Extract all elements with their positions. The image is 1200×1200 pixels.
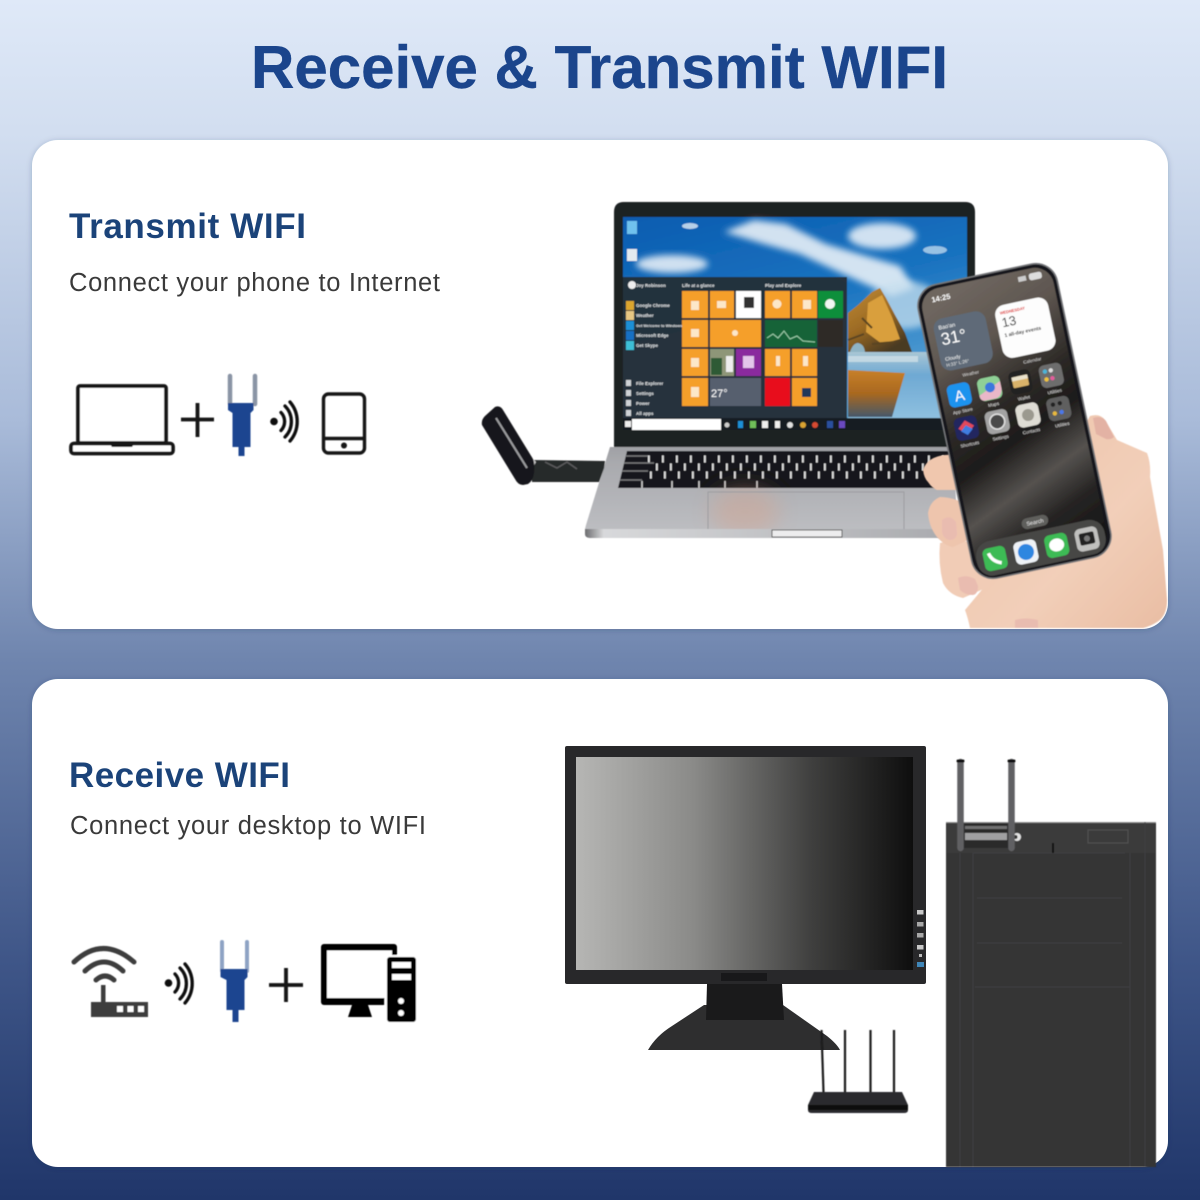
taskbar start button bbox=[625, 421, 631, 427]
laptop lid bbox=[614, 202, 975, 447]
start menu bbox=[623, 277, 847, 418]
calendar widget: Calendar bbox=[1023, 356, 1042, 365]
taskbar icons bbox=[724, 421, 845, 428]
start menu tiles bbox=[682, 291, 843, 406]
icon: signal waves bbox=[270, 402, 297, 441]
start menu list: Microsoft Edge bbox=[636, 333, 669, 338]
image: router bbox=[808, 1030, 908, 1113]
weather widget: H:33° L:26° bbox=[946, 358, 970, 368]
tower dongle roller bbox=[965, 833, 1007, 840]
weather widget: 31° bbox=[939, 325, 968, 349]
start menu list: File Explorer bbox=[636, 381, 664, 386]
router antennas bbox=[822, 1030, 894, 1092]
search pill: Search bbox=[1026, 518, 1044, 528]
panel background: transmit bbox=[32, 140, 1168, 629]
icon: plus bbox=[269, 968, 303, 1002]
finger two bbox=[928, 497, 972, 547]
icon: signal waves bbox=[165, 964, 192, 1003]
start menu list: Google Chrome bbox=[636, 303, 670, 308]
app labels: Contacts bbox=[1022, 427, 1041, 435]
finger nails bbox=[942, 517, 1038, 628]
app labels: Shortcuts bbox=[960, 440, 980, 449]
laptop base deck bbox=[585, 447, 957, 529]
tower top band bbox=[947, 823, 1155, 853]
dongle usb body bbox=[532, 460, 605, 482]
dock bbox=[973, 517, 1109, 579]
calendar widget: WEDNESDAY bbox=[999, 305, 1026, 316]
text: connect desktop: Connect your desktop to WIFI bbox=[70, 812, 426, 840]
hand palm bbox=[965, 415, 1167, 628]
tower port bbox=[1052, 843, 1054, 853]
tower panel lines bbox=[960, 822, 1145, 1167]
start menu list: Get Welcome to Windows 10 bbox=[636, 324, 688, 328]
calendar widget: 1 all-day events bbox=[1004, 325, 1042, 339]
weather widget: Weather bbox=[962, 369, 980, 378]
weather widget: Bao'an bbox=[938, 322, 956, 332]
deck reflection bbox=[711, 488, 779, 536]
heading: transmit wifi: Transmit WIFI bbox=[69, 207, 306, 246]
image: monitor bbox=[565, 746, 926, 1050]
image: usb wifi dongle bbox=[482, 406, 605, 485]
image: desktop tower with dongle bbox=[946, 761, 1156, 1167]
app icons: A bbox=[953, 387, 966, 406]
tile icons bbox=[691, 300, 811, 397]
search pill bbox=[1021, 514, 1049, 530]
phone body bbox=[914, 260, 1115, 582]
icon: tablet bbox=[324, 394, 364, 453]
app icons bbox=[946, 362, 1073, 442]
app labels bbox=[952, 387, 1071, 449]
icon: blue dongle bbox=[220, 942, 248, 1022]
monitor frame bbox=[565, 746, 926, 984]
monitor stand neck bbox=[706, 984, 784, 1020]
icon row: laptop plus dongle to tablet bbox=[71, 376, 364, 456]
text: connect phone: Connect your phone to Internet bbox=[69, 269, 440, 297]
icon: plus bbox=[181, 403, 214, 437]
start menu list: All apps bbox=[636, 411, 654, 416]
weather widget bbox=[932, 309, 997, 382]
dongle antenna bbox=[482, 406, 534, 485]
hinge notch bbox=[772, 530, 842, 537]
panel: transmit wifi bbox=[32, 140, 1168, 629]
phone screen bbox=[919, 264, 1110, 578]
image: hand holding phone bbox=[914, 260, 1167, 628]
sea and reflection bbox=[848, 352, 967, 418]
taskbar search box bbox=[632, 419, 721, 430]
keyboard bbox=[618, 451, 960, 488]
start menu list: Play and Explore bbox=[765, 283, 802, 288]
start menu list bbox=[626, 281, 802, 416]
antenna caps bbox=[958, 760, 1014, 762]
icon row: router to dongle plus desktop bbox=[74, 942, 418, 1024]
laptop screen wallpaper bbox=[623, 217, 967, 430]
tower top edge bbox=[946, 822, 1156, 824]
finger one bbox=[923, 454, 965, 490]
app labels: Maps bbox=[988, 401, 1000, 408]
weather widget: Cloudy bbox=[945, 354, 962, 363]
monitor screen bbox=[576, 757, 913, 970]
icon: desktop computer bbox=[321, 944, 418, 1024]
status bar: 14:25 bbox=[931, 292, 951, 305]
panel background: receive bbox=[32, 679, 1168, 1167]
start menu list: Power bbox=[636, 401, 650, 406]
monitor logo tab bbox=[721, 973, 767, 981]
app labels: Utilities bbox=[1055, 421, 1071, 429]
island bbox=[848, 288, 912, 352]
tower dongle antennas bbox=[960, 762, 1012, 848]
phone bbox=[914, 260, 1115, 582]
app labels: Settings bbox=[992, 433, 1010, 442]
start menu list: Joy Robinson bbox=[636, 283, 666, 288]
tower dongle body bbox=[959, 823, 1013, 848]
tower body bbox=[946, 822, 1156, 1167]
calendar widget bbox=[993, 296, 1059, 369]
start menu list: Life at a glance bbox=[682, 283, 715, 288]
trackpad bbox=[708, 492, 904, 529]
image: laptop bbox=[585, 202, 975, 538]
calendar widget: 13 bbox=[1000, 313, 1018, 330]
router body bbox=[808, 1092, 908, 1113]
app labels: Utilities bbox=[1047, 387, 1063, 395]
status bar bbox=[930, 271, 1043, 305]
icon: laptop bbox=[71, 386, 173, 454]
usb port ring bbox=[1013, 833, 1021, 841]
laptop front lip bbox=[585, 529, 960, 538]
app labels: App Store bbox=[952, 406, 974, 416]
taskbar bbox=[623, 418, 967, 430]
panel: receive wifi bbox=[32, 679, 1168, 1167]
monitor buttons bbox=[917, 910, 924, 967]
app labels: Wallet bbox=[1017, 394, 1031, 402]
dongle silver joint bbox=[527, 459, 536, 471]
icon: blue dongle bbox=[228, 376, 255, 456]
heading: receive wifi: Receive WIFI bbox=[69, 756, 290, 795]
thumb nail bbox=[1093, 417, 1114, 439]
start menu list: Get Skype bbox=[636, 343, 659, 348]
start menu list: Settings bbox=[636, 391, 654, 396]
finger three bbox=[939, 541, 991, 598]
desktop icons bbox=[627, 221, 637, 261]
icon: wifi router bbox=[74, 948, 148, 1017]
monitor stand base bbox=[648, 1005, 840, 1050]
title: Receive & Transmit WIFI bbox=[251, 34, 948, 101]
start menu list: Weather bbox=[636, 313, 654, 318]
weather tile text: 27° bbox=[711, 388, 728, 400]
